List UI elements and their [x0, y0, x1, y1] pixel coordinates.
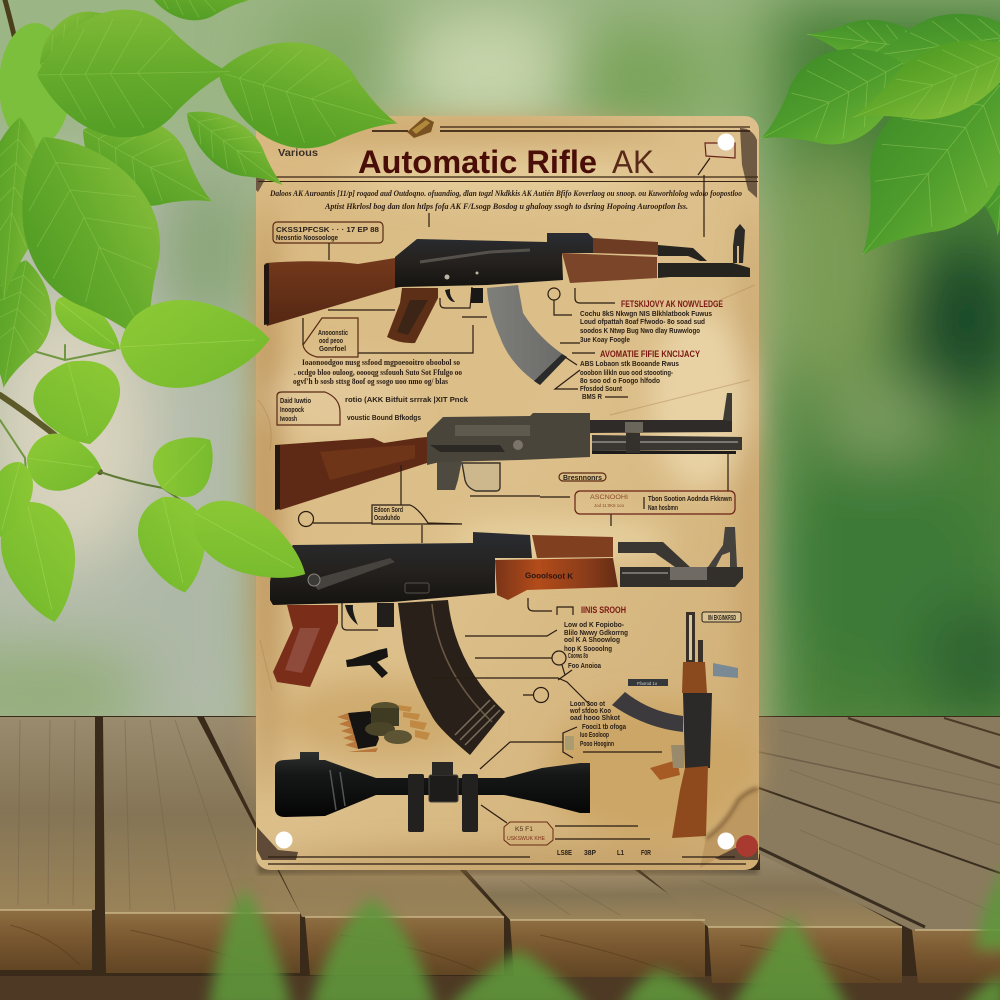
- small box, left: [303, 318, 358, 357]
- accuracy text: ooobon lilkln ouo ood stoooting-: [580, 368, 673, 377]
- mounting holes: [276, 134, 734, 850]
- bottom specs row: F0R: [641, 848, 651, 857]
- accuracy text: [580, 359, 679, 401]
- annotation group, rifle 3: [430, 598, 662, 823]
- leaves, right cluster: [740, 5, 1000, 295]
- section text: ool K A Shoowlog: [564, 635, 620, 644]
- left paragraph: [293, 358, 462, 386]
- bottom specs row: L1: [617, 848, 625, 857]
- corner ornament, bottom right: [715, 848, 758, 860]
- rifle notes: voustic Bound Bfkodgs: [347, 413, 421, 422]
- label: Various: Various: [278, 147, 318, 159]
- leader lines, top: [429, 158, 710, 237]
- red bordered info box: ASCNOOHI: [590, 495, 628, 501]
- heading tag: [705, 143, 735, 158]
- sign shadow: [258, 864, 758, 874]
- edon label: [374, 505, 403, 522]
- knowledge text: 3ue Koay Foogle: [580, 335, 630, 344]
- accuracy text: Ffosdod Sount: [580, 384, 622, 393]
- callout: knowledge heading: FETSKIJOVY AK NOWVLEDGE: [621, 299, 723, 309]
- accuracy text: 8o soo od o Foogo hlfodo: [580, 376, 660, 385]
- small label: Bresnnonrs: [563, 473, 602, 482]
- lower notes: wof sfdoo Koo: [569, 706, 611, 715]
- section text: hop K Soooolng: [564, 644, 612, 653]
- section text: Foo Anoioa: [568, 661, 602, 670]
- rifle notes: rotio (AKK Bitfuit srrrak |XIT Pnck: [345, 395, 469, 404]
- callout: accuracy heading: AVOMATIE FIFIE KNCIJACY: [600, 349, 700, 359]
- icon: small pistol: [346, 648, 388, 678]
- plank 6 and right side boards: [759, 717, 1000, 983]
- plank 5: [640, 850, 902, 983]
- accuracy text: ABS Lobaon stk Booande Rwus: [580, 359, 679, 368]
- section text: Blilo Nwwy Gdkorrng: [564, 628, 628, 637]
- bottom box: [504, 822, 650, 845]
- bottom specs row: 38P: [584, 848, 596, 857]
- top tag: [702, 612, 741, 622]
- intro paragraph: [269, 189, 742, 211]
- red bordered info box: Nan hosbmn: [648, 503, 678, 512]
- rifle 3: black and red wood AK: [270, 527, 743, 755]
- edon label: Edoon Sord: [374, 505, 403, 514]
- small box, left: ood peoo: [319, 336, 343, 345]
- branches: [0, 0, 195, 510]
- rifle 2: wood stock side view: [275, 393, 742, 510]
- icon: flag: [713, 663, 738, 678]
- metal sign panel: [254, 116, 760, 870]
- knowledge text: soodos K Ntwp Bug Nwo dlay Ruwwlogo: [580, 326, 700, 335]
- plank 4: [466, 870, 705, 977]
- info box top left: [273, 222, 383, 243]
- blurred foreground leaves: [208, 860, 1000, 1000]
- small box, left: Anooonstic: [318, 328, 348, 337]
- lower notes: [569, 699, 627, 748]
- torn paper, lower right: [700, 788, 758, 868]
- small plate: Ffoorod 1o: [637, 681, 657, 686]
- header rule lines: [258, 127, 758, 182]
- red bordered info box: Tbon Sootion Aodnda Fkknwn: [648, 494, 732, 503]
- corner ornament, bottom left: [257, 827, 298, 860]
- corner ornament, top right: [740, 128, 757, 198]
- knowledge text: Cochu 8kS Nkwgn NIS Blkhlatbook Fuwus: [580, 309, 712, 318]
- knowledge text: [580, 309, 712, 344]
- info box top left: CKSS1PFCSK · · · 17 EP 88: [276, 225, 379, 234]
- lower notes: Loon 3oo ot: [570, 699, 605, 708]
- section heading: IINIS SROOH: [581, 605, 626, 615]
- notes box: Inoopock: [280, 405, 305, 414]
- left paragraph: . ocdgo bloo ouloog, ooooqg ssfouoh Suto Sot Ffulgo oo: [294, 368, 462, 377]
- title suffix AK: AK: [612, 144, 654, 180]
- plank 3: [204, 717, 504, 975]
- section text: Coorws 8o: [568, 651, 588, 660]
- bottom specs row: LS8E: [557, 848, 572, 857]
- annotation group, rifle 1: [303, 243, 628, 397]
- lower notes: Fooci1 tb ofoga: [582, 722, 627, 731]
- wooden deck planks: [0, 716, 1000, 1000]
- annotation group, rifle 2: [298, 451, 728, 543]
- lower notes: oad hooo Shkot: [570, 713, 620, 722]
- bottom specs row: [268, 848, 746, 864]
- red bordered info box: Jod 11:0K5 1oo: [594, 503, 624, 508]
- left paragraph: Ioaonoodgoo nusg ssfood mgpoeooitro oboobol so: [302, 358, 460, 367]
- icon: ammunition pile: [337, 702, 430, 752]
- rifle 4: vertical AK: [612, 612, 712, 838]
- crumple marks: [258, 285, 755, 690]
- icon: bullet casing: [407, 117, 434, 138]
- left paragraph: ogvf'h b sosb sttsg 8oof og ssogo uoo nmo og/ blas: [293, 377, 448, 386]
- notes box: [277, 392, 340, 425]
- leaves, left cluster: [0, 0, 412, 630]
- section text: [564, 620, 628, 670]
- edon label: Ocaduhdo: [374, 513, 400, 522]
- blurred background foliage: [0, 0, 1000, 760]
- accuracy text: BMS R: [582, 392, 602, 401]
- plank 2: [103, 717, 300, 973]
- rifle 1: side view AK: [264, 224, 750, 385]
- plank 1: [0, 717, 95, 970]
- knowledge text: Loud ofpattah 8oaf Ffwodo- 8o soad sud: [580, 317, 705, 326]
- small plate: [628, 679, 668, 686]
- left edge ornament: [256, 172, 266, 192]
- icon: wax seal: [736, 835, 758, 857]
- intro paragraph: Aptist Hkrlosl bog dan tlon htlps fofa AK F/Lsogp Bosdog u ghaloay ssogh to dsring Hopoing Aurooptlon lss.: [324, 202, 688, 211]
- section text: Low od K Fopiobo-: [564, 620, 624, 629]
- notes box: Iwoosh: [280, 414, 297, 423]
- rifle 3: black and red wood AK: Gooolsoot K: [525, 571, 573, 581]
- intro paragraph: Daloos AK Auroantis [11/p] roqaod aud Outdoqno. ofuandiog, dlan togzl Nkdkkis AK Autién Bfifo Koverlaog ou snoop. ou Kuworhlolog wdolo foopostloo: [269, 189, 742, 198]
- small box, left: Gonrfoel: [319, 344, 346, 353]
- lower notes: Iuo Eooloop: [580, 730, 609, 739]
- rifle notes: [345, 395, 469, 422]
- notes box: Daid Iuwtio: [280, 396, 311, 405]
- bottom box: USKSWUK KHE: [507, 836, 546, 842]
- scope: [275, 752, 590, 832]
- top tag: IIN EKGINKRSD: [708, 613, 736, 622]
- red bordered info box: [575, 491, 735, 514]
- bottom box: K5 F1: [515, 827, 534, 833]
- lower notes: Pooo Hooginn: [580, 739, 614, 748]
- title: Automatic Rifle: [358, 144, 597, 180]
- info box top left: Neosntio Noosoologe: [276, 233, 338, 242]
